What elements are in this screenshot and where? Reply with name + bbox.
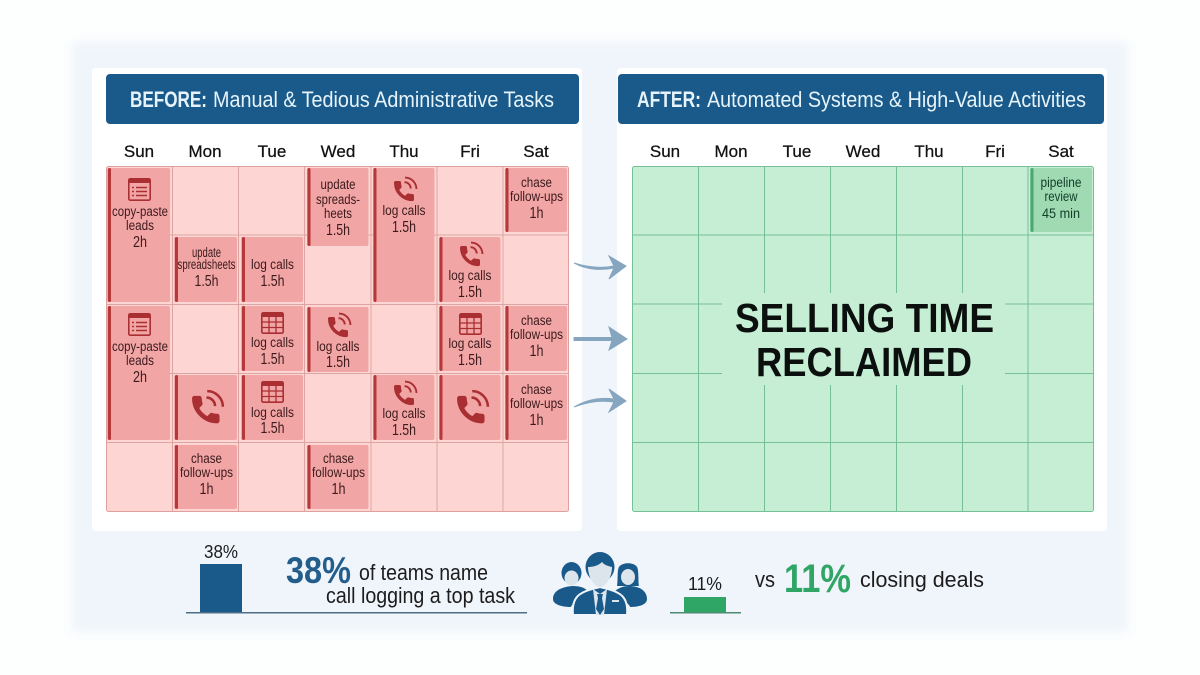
bar chart: 11 percent bbox=[670, 574, 741, 614]
task: chase follow-ups sat second bbox=[505, 306, 567, 371]
task: chase follow-ups wed: 1h bbox=[332, 481, 346, 498]
task: log calls fri table: log calls bbox=[448, 336, 492, 351]
task: log calls: 1.5h bbox=[260, 273, 284, 290]
weekday labels: after: Sun bbox=[650, 142, 680, 161]
task: pipeline review: 45 min bbox=[1042, 205, 1080, 221]
task: log calls wed bbox=[307, 307, 368, 372]
task: log calls fri: 1.5h bbox=[458, 284, 482, 301]
task: copy-paste leads: 2h bbox=[133, 234, 147, 251]
stat text: 11 percent: vs bbox=[755, 567, 775, 592]
task: log calls fri table bbox=[439, 306, 500, 371]
weekday labels: before: Wed bbox=[321, 142, 355, 161]
task: log calls thu second: log calls bbox=[382, 406, 426, 421]
task: copy-paste leads second: leads bbox=[126, 353, 154, 368]
task: log calls tue table: log calls bbox=[251, 335, 294, 350]
stat text: 11 percent: closing deals bbox=[860, 567, 984, 592]
arrow: bottom bbox=[574, 389, 626, 412]
task: log calls bbox=[241, 237, 303, 302]
task: update spreadsheets wed: update bbox=[320, 177, 356, 192]
task: log calls thu second: 1.5h bbox=[392, 422, 416, 439]
task: chase follow-ups sat: chase bbox=[521, 175, 552, 190]
task: chase follow-ups sat second: 1h bbox=[530, 343, 544, 360]
headline: selling time reclaimed: RECLAIMED bbox=[756, 339, 972, 385]
calendar grid: before bbox=[106, 166, 569, 512]
task: log calls fri bbox=[439, 237, 500, 302]
task: update spreadsheets: 1.5h bbox=[194, 273, 218, 290]
stat text: 11 percent: 11% bbox=[784, 557, 851, 601]
task: update spreadsheets wed: 1.5h bbox=[326, 222, 350, 239]
task: chase follow-ups mon bbox=[174, 445, 237, 509]
task: chase follow-ups sat second: chase bbox=[521, 313, 552, 328]
weekday labels: before: Mon bbox=[188, 142, 222, 161]
task: log calls fri table: 1.5h bbox=[458, 352, 482, 369]
weekday labels: before: Fri bbox=[460, 142, 480, 161]
task: chase follow-ups sat second: follow-ups bbox=[510, 327, 563, 342]
heading: before bbox=[106, 74, 579, 124]
task: chase follow-ups mon: 1h bbox=[200, 481, 214, 498]
task: log calls thu: log calls bbox=[382, 203, 426, 218]
weekday labels: after: Sat bbox=[1048, 142, 1074, 161]
task: log calls wed: log calls bbox=[316, 339, 360, 354]
heading: after: Automated Systems & High-Value Activities bbox=[707, 87, 1086, 112]
stat text: 38 percent: of teams name bbox=[359, 560, 488, 585]
stat text: 11 percent bbox=[755, 557, 984, 601]
task: log calls thu bbox=[373, 168, 434, 302]
task: call icon mon bbox=[174, 375, 237, 440]
task: copy-paste leads: leads bbox=[126, 218, 154, 233]
task: copy-paste leads second bbox=[107, 306, 170, 440]
weekday labels: after: Fri bbox=[985, 142, 1005, 161]
task: update spreadsheets: spreadsheets bbox=[178, 257, 236, 272]
arrow: top bbox=[574, 256, 626, 279]
calendar grid: after bbox=[632, 166, 1094, 512]
task: log calls tue table second bbox=[241, 375, 303, 440]
stat text: 38 percent: call logging a top task bbox=[326, 583, 516, 608]
task: chase follow-ups mon: follow-ups bbox=[180, 465, 233, 480]
task: log calls tue table bbox=[241, 306, 303, 371]
arrow: middle bbox=[574, 327, 627, 350]
task: pipeline review bbox=[1030, 168, 1092, 232]
heading: before: Manual & Tedious Administrative Tasks bbox=[213, 87, 554, 112]
bar chart: 38 percent: 38% bbox=[204, 542, 238, 562]
weekday labels: after: Wed bbox=[846, 142, 880, 161]
task: chase follow-ups wed: follow-ups bbox=[312, 465, 365, 480]
task: log calls tue table second: log calls bbox=[251, 405, 294, 420]
right person bbox=[614, 563, 647, 607]
task: update spreadsheets wed bbox=[307, 168, 368, 246]
stat text: 38 percent bbox=[286, 550, 516, 608]
task: log calls tue table: 1.5h bbox=[260, 351, 284, 368]
weekday labels: before: Tue bbox=[258, 142, 286, 161]
task: update spreadsheets: update bbox=[192, 245, 221, 260]
weekday labels: before bbox=[124, 142, 549, 161]
heading: after: AFTER: bbox=[637, 87, 701, 112]
task: chase follow-ups wed: chase bbox=[323, 451, 354, 466]
task: log calls fri: log calls bbox=[448, 268, 492, 283]
task: chase follow-ups sat third bbox=[505, 375, 567, 440]
task: call icon fri bbox=[439, 375, 500, 440]
weekday labels: before: Sat bbox=[523, 142, 549, 161]
icon: team of people bbox=[553, 552, 647, 615]
task: pipeline review: pipeline bbox=[1040, 175, 1082, 190]
panel: after bbox=[617, 68, 1107, 531]
weekday labels: after: Mon bbox=[714, 142, 748, 161]
bar chart: 11 percent: 11% bbox=[688, 574, 722, 594]
center person bbox=[573, 552, 627, 615]
headline: selling time reclaimed bbox=[722, 293, 1005, 385]
stat text: 38 percent: 38% bbox=[286, 550, 351, 591]
task: chase follow-ups sat: follow-ups bbox=[510, 189, 563, 204]
left person bbox=[553, 562, 588, 607]
page background panel bbox=[72, 42, 1128, 632]
task: log calls wed: 1.5h bbox=[326, 354, 350, 371]
task: update spreadsheets bbox=[174, 237, 237, 302]
heading: after bbox=[618, 74, 1104, 124]
bar chart: 38 percent bbox=[186, 542, 527, 614]
task: chase follow-ups sat third: follow-ups bbox=[510, 396, 563, 411]
task: copy-paste leads: copy-paste bbox=[112, 204, 168, 219]
task: copy-paste leads bbox=[107, 168, 170, 302]
task: log calls: log calls bbox=[251, 257, 294, 272]
panel: before bbox=[92, 68, 582, 531]
task: chase follow-ups sat third: 1h bbox=[530, 412, 544, 429]
task: log calls thu: 1.5h bbox=[392, 219, 416, 236]
task: log calls thu second bbox=[373, 375, 434, 440]
task: copy-paste leads second: copy-paste bbox=[112, 339, 168, 354]
task: chase follow-ups sat third: chase bbox=[521, 382, 552, 397]
weekday labels: after: Tue bbox=[783, 142, 811, 161]
weekday labels: after: Thu bbox=[914, 142, 944, 161]
weekday labels: before: Thu bbox=[389, 142, 419, 161]
task: chase follow-ups wed bbox=[307, 445, 368, 509]
task: log calls tue table second: 1.5h bbox=[260, 420, 284, 437]
headline: selling time reclaimed: SELLING TIME bbox=[735, 295, 994, 341]
task: pipeline review: review bbox=[1044, 189, 1078, 204]
task: chase follow-ups sat bbox=[505, 168, 567, 232]
task: update spreadsheets wed: heets bbox=[324, 206, 352, 221]
weekday labels: after bbox=[650, 142, 1074, 161]
task: chase follow-ups mon: chase bbox=[191, 451, 222, 466]
task: copy-paste leads second: 2h bbox=[133, 369, 147, 386]
heading: before: BEFORE: bbox=[130, 87, 207, 112]
task: update spreadsheets wed: spreads- bbox=[316, 192, 360, 207]
task: chase follow-ups sat: 1h bbox=[530, 205, 544, 222]
weekday labels: before: Sun bbox=[124, 142, 154, 161]
